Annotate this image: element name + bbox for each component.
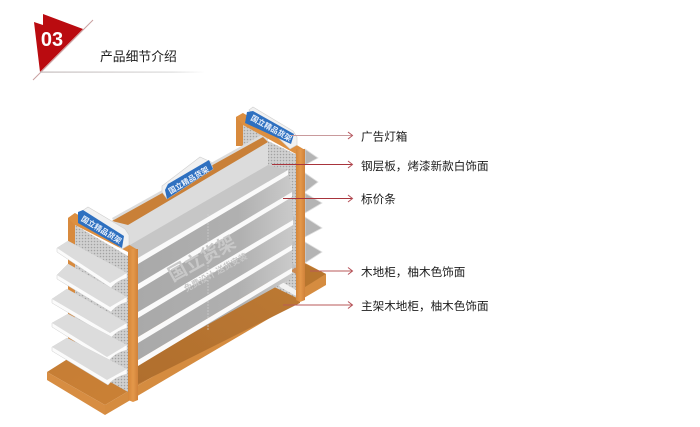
callout: steel shelf — [272, 159, 489, 173]
right end panel — [243, 124, 297, 298]
callout: light box — [291, 130, 407, 144]
callout: price strip — [283, 192, 396, 206]
sign: left light box — [78, 207, 129, 249]
icon: red triangle badge — [33, 14, 93, 80]
long side shelf bands — [138, 170, 293, 364]
shelf unit illustration — [47, 107, 326, 415]
callouts — [272, 130, 489, 313]
callout: wood base cabinet: 木地柜，柚木色饰面 — [361, 265, 465, 279]
long side back panel — [112, 134, 288, 258]
callout: price strip: 标价条 — [361, 192, 396, 206]
perforated left end panel — [75, 225, 128, 392]
callout: main frame wood base: 主架木地柜，柚木色饰面 — [361, 299, 489, 313]
price strips — [138, 170, 293, 366]
left protruding shelves — [52, 241, 127, 385]
callout: main frame wood base — [283, 299, 489, 313]
section header — [33, 14, 205, 80]
wood base — [47, 263, 326, 415]
heading: 产品细节介绍 — [100, 49, 177, 64]
top beams — [68, 113, 305, 256]
sign: right light box — [245, 107, 297, 149]
callout: wood base cabinet — [310, 265, 465, 279]
callout: light box: 广告灯箱 — [361, 130, 407, 144]
sign: middle light box — [162, 157, 213, 199]
callout: steel shelf: 钢层板，烤漆新款白饰面 — [361, 159, 489, 173]
right protruding shelves — [268, 149, 322, 270]
sign: left light box: 国立精品货架 — [79, 213, 124, 246]
watermark: 国立货架 — [164, 231, 239, 285]
sign: right light box: 国立精品货架 — [249, 112, 294, 143]
icon: red triangle badge: 03 — [41, 29, 63, 51]
front right post — [296, 149, 305, 302]
back posts and end frames — [68, 113, 243, 345]
heading rule — [40, 72, 205, 73]
watermark: 免费设计 送货安装 — [182, 251, 249, 294]
sign: middle light box: 国立精品货架 — [166, 164, 211, 196]
front left post — [128, 249, 138, 402]
